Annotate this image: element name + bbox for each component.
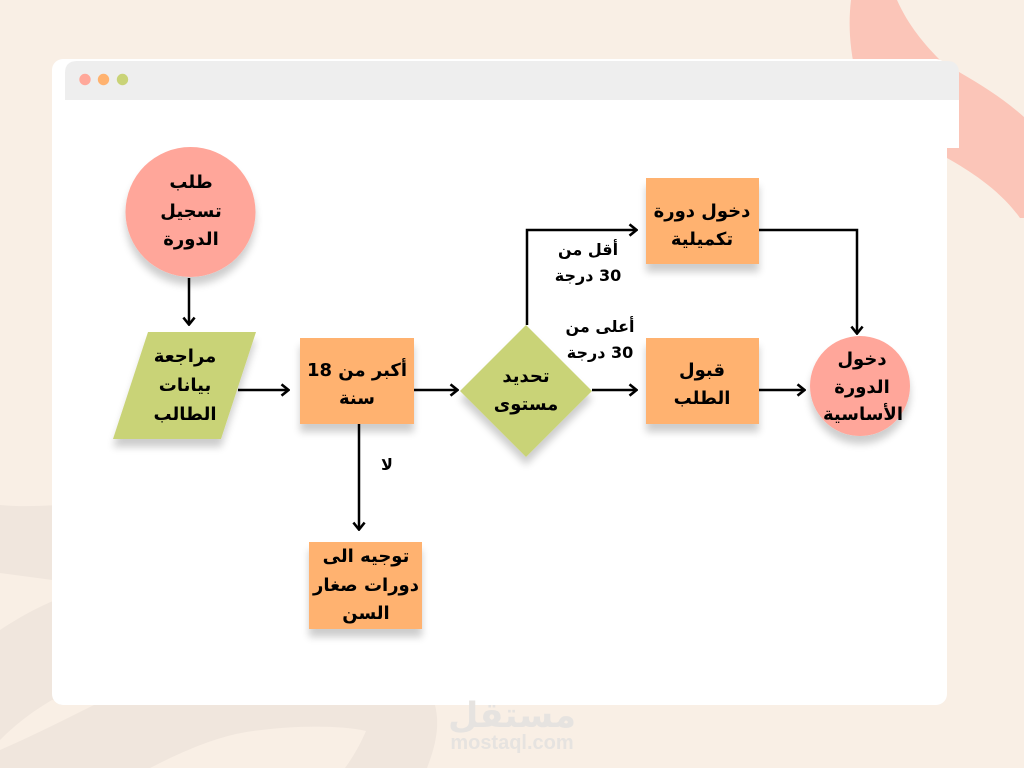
arrow: acceptance to basic course bbox=[759, 389, 804, 391]
node: enter basic course bbox=[810, 336, 910, 436]
label: above 30: 30 درجة bbox=[567, 343, 633, 362]
node: course registration request: طلب bbox=[169, 172, 213, 193]
node: course registration request bbox=[126, 147, 256, 277]
arrow: level to supplementary course bbox=[527, 230, 636, 325]
arrow: level to acceptance bbox=[592, 389, 636, 391]
decorative shape: pink leaf bbox=[850, 0, 1024, 218]
node: junior courses: دورات صغار bbox=[312, 575, 419, 596]
window control dots bbox=[79, 74, 128, 85]
node: course registration request: تسجيل bbox=[160, 201, 222, 222]
arrow: age check to junior courses bbox=[358, 424, 360, 529]
node: determine level: تحديد bbox=[502, 366, 550, 387]
node: review student data: بيانات bbox=[159, 375, 211, 396]
label: above 30 bbox=[565, 316, 635, 362]
label: under 30: أقل من bbox=[558, 239, 618, 259]
node: determine level: مستوى bbox=[494, 394, 558, 415]
node: determine level bbox=[460, 325, 592, 457]
node: review student data bbox=[113, 332, 256, 439]
node: supplementary course bbox=[646, 178, 759, 264]
node: enter basic course: الدورة bbox=[834, 377, 890, 398]
node: supplementary course: تكميلية bbox=[671, 229, 733, 250]
node: junior courses bbox=[309, 542, 422, 629]
node: accept application: قبول bbox=[679, 360, 725, 381]
node: supplementary course: دخول دورة bbox=[654, 201, 750, 222]
node: accept application bbox=[646, 338, 759, 424]
arrow: age check to level bbox=[414, 389, 457, 391]
node: accept application: الطلب bbox=[674, 388, 730, 409]
arrows bbox=[189, 230, 857, 529]
node: enter basic course: الأساسية bbox=[823, 403, 903, 425]
node: over 18 bbox=[300, 338, 414, 424]
arrow: review to age check bbox=[238, 389, 288, 391]
panel: browser window bbox=[52, 59, 959, 705]
label: under 30 bbox=[555, 239, 621, 285]
label: above 30: أعلى من bbox=[565, 316, 635, 336]
node: review student data: مراجعة bbox=[154, 346, 216, 367]
label: under 30: 30 درجة bbox=[555, 266, 621, 285]
arrow: supplementary to basic course bbox=[759, 230, 857, 333]
label: no: لا bbox=[381, 455, 393, 474]
node: over 18: أكبر من 18 bbox=[307, 358, 407, 381]
node: enter basic course: دخول bbox=[837, 349, 887, 370]
arrow: request to review bbox=[188, 278, 190, 324]
window title bar bbox=[65, 61, 959, 100]
node: review student data: الطالب bbox=[153, 404, 217, 425]
decorative shape: beige leaves bbox=[0, 505, 437, 768]
node: course registration request: الدورة bbox=[163, 229, 219, 250]
watermark: mostaql.com bbox=[450, 732, 574, 754]
watermark bbox=[448, 696, 576, 754]
node: junior courses: السن bbox=[342, 603, 390, 624]
node: junior courses: توجيه الى bbox=[323, 546, 409, 567]
watermark: مستقل bbox=[448, 696, 576, 736]
node: over 18: سنة bbox=[339, 388, 375, 409]
